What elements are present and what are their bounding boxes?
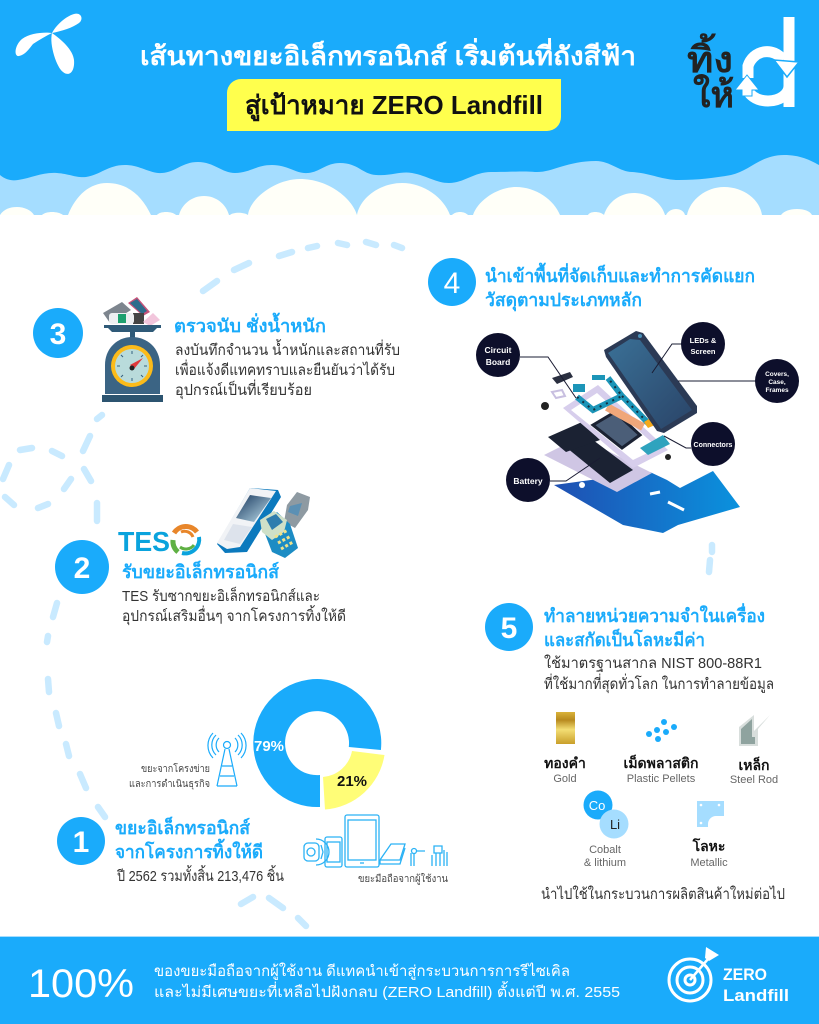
donut chart: [253, 679, 384, 810]
title: เส้นทางขยะอิเล็กทรอนิกส์ เริ่มต้นที่ถังสีฟ้า: [140, 37, 636, 71]
step 1: [57, 679, 448, 885]
step 3 heading: ตรวจนับ ชั่งน้ำหนัก: [174, 312, 326, 336]
icon: target: [669, 947, 719, 1001]
callout: circuit board: Circuit: [485, 345, 512, 355]
material: plastic pellets: Plastic Pellets: [627, 773, 696, 785]
callout: leds and screen: [681, 322, 725, 366]
callout: leds and screen: Screen: [690, 347, 716, 356]
material: metallic: Metallic: [690, 857, 728, 869]
step 1 number: 1: [73, 826, 89, 859]
material: metallic: โลหะ: [692, 837, 725, 854]
step 5 closing note: นำไปใช้ในกระบวนการผลิตสินค้าใหม่ต่อไป: [541, 885, 785, 903]
step 5 heading: และสกัดเป็นโลหะมีค่า: [544, 628, 705, 650]
step 5 heading: [544, 603, 765, 650]
material: steel rod: [730, 715, 778, 786]
callout: circuit board: [476, 333, 520, 377]
material: gold: [544, 712, 586, 785]
step 5: [485, 603, 785, 903]
icon: scale with phones: [102, 297, 163, 402]
step 2 body: [122, 586, 346, 626]
callout: covers: [755, 359, 799, 403]
material: plastic pellets: เม็ดพลาสติก: [624, 754, 698, 771]
step 5 number: 5: [501, 612, 517, 645]
logo: ทิ้งให้ดี: ให้: [693, 73, 734, 115]
logo: TES: [118, 526, 199, 557]
step 4 number: 4: [444, 267, 460, 300]
icon: old phones: [217, 488, 310, 558]
step 4 heading: [485, 262, 755, 312]
logo: TES: TES: [118, 526, 170, 557]
step 2 number: [55, 540, 109, 594]
material: gold: ทองคำ: [544, 755, 586, 771]
material: gold: Gold: [553, 773, 577, 785]
subtitle banner: สู่เป้าหมาย ZERO Landfill: [245, 90, 543, 122]
callout: covers: Case,: [768, 379, 786, 386]
callout: battery: Battery: [513, 476, 543, 486]
step 2: [55, 488, 346, 626]
callout: connectors: Connectors: [694, 442, 733, 449]
zero landfill label: Landfill: [723, 986, 789, 1005]
step 5 heading: ทำลายหน่วยความจำในเครื่อง: [544, 603, 765, 626]
step 3 body: อุปกรณ์เป็นที่เรียบร้อย: [175, 379, 312, 400]
label: network waste: ขยะจากโครงข่าย: [141, 762, 210, 775]
icon: network tower: [208, 733, 246, 786]
step 5 number: [485, 603, 533, 651]
zero landfill label: ZERO: [723, 965, 767, 984]
material: cobalt and lithium: [584, 790, 628, 869]
callout: covers: Covers,: [765, 371, 789, 378]
diagram: exploded phone: [476, 322, 799, 533]
dashed route path: [3, 242, 712, 926]
step 5 body: ใช้มาตรฐานสากล NIST 800-88R1: [544, 654, 762, 672]
step 1 number: [57, 817, 105, 865]
material: cobalt and lithium: Li: [610, 817, 620, 832]
footer text: ของขยะมือถือจากผู้ใช้งาน ดีแทคนำเข้าสู่กระบวนการการรีไซเคิล: [154, 962, 570, 980]
donut chart: 79%: [254, 738, 284, 755]
callout: connectors: [691, 422, 735, 466]
step 2 heading: รับขยะอิเล็กทรอนิกส์: [122, 560, 280, 582]
step 1 heading: จากโครงการทิ้งให้ดี: [115, 838, 263, 862]
step 4 heading: วัสดุตามประเภทหลัก: [485, 290, 642, 312]
logo: telenor: [16, 14, 81, 74]
material: cobalt and lithium: Cobalt: [589, 844, 621, 856]
callout lines: [520, 344, 755, 481]
material: steel rod: Steel Rod: [730, 774, 778, 786]
material: cobalt and lithium: & lithium: [584, 857, 626, 869]
step 5 body: ที่ใช้มากที่สุดทั่วโลก ในการทำลายข้อมูล: [544, 673, 774, 694]
header background: [0, 0, 819, 215]
callout: circuit board: Board: [486, 357, 510, 367]
subtitle banner: [227, 79, 561, 131]
step 1 heading: ขยะอิเล็กทรอนิกส์: [115, 816, 251, 838]
callout: leds and screen: LEDs &: [690, 336, 717, 345]
material: cobalt and lithium: Co: [589, 798, 605, 813]
callout: covers: Frames: [765, 387, 789, 394]
step 5 body: [544, 654, 774, 694]
step 3: [33, 297, 400, 402]
step 3 body: [175, 339, 400, 400]
step 2 number: 2: [74, 552, 90, 585]
label: network waste: [129, 762, 210, 790]
label: network waste: และการดำเนินธุรกิจ: [129, 779, 210, 790]
material: steel rod: เหล็ก: [738, 756, 770, 773]
step 3 number: [33, 308, 83, 358]
footer text: และไม่มีเศษขยะที่เหลือไปฝังกลบ (ZERO Landfill) ตั้งแต่ปี พ.ศ. 2555: [154, 981, 620, 1001]
step 3 number: 3: [50, 318, 66, 351]
step 2 body: อุปกรณ์เสริมอื่นๆ จากโครงการทิ้งให้ดี: [122, 605, 346, 626]
logo: ทิ้งให้ดี: [687, 17, 799, 115]
donut chart: 21%: [337, 773, 367, 790]
material: plastic pellets: [624, 719, 698, 785]
step 4 heading: นำเข้าพื้นที่จัดเก็บและทำการคัดแยก: [485, 262, 755, 286]
step 1 body: ปี 2562 รวมทั้งสิ้น 213,476 ชิ้น: [116, 865, 284, 885]
step 1 heading: [115, 816, 263, 862]
footer statistic: 100%: [28, 962, 134, 1006]
step 3 body: ลงบันทึกจำนวน น้ำหนักและสถานที่รับ: [175, 339, 400, 359]
material: metallic: [690, 801, 728, 869]
step 4: [428, 258, 799, 533]
logo: ทิ้งให้ดี: ทิ้ง: [687, 33, 733, 80]
step 3 body: เพื่อแจ้งดีแทคทราบและยืนยันว่าได้รับ: [175, 359, 395, 379]
step 2 body: TES รับซากขยะอิเล็กทรอนิกส์และ: [122, 586, 320, 605]
footer text: [154, 962, 620, 1001]
callout: battery: [506, 458, 550, 502]
zero landfill label: [723, 965, 789, 1005]
icon: consumer devices: [304, 815, 447, 867]
footer band: [0, 936, 819, 1024]
step 4 number: [428, 258, 476, 306]
label: consumer waste: ขยะมือถือจากผู้ใช้งาน: [358, 873, 448, 885]
